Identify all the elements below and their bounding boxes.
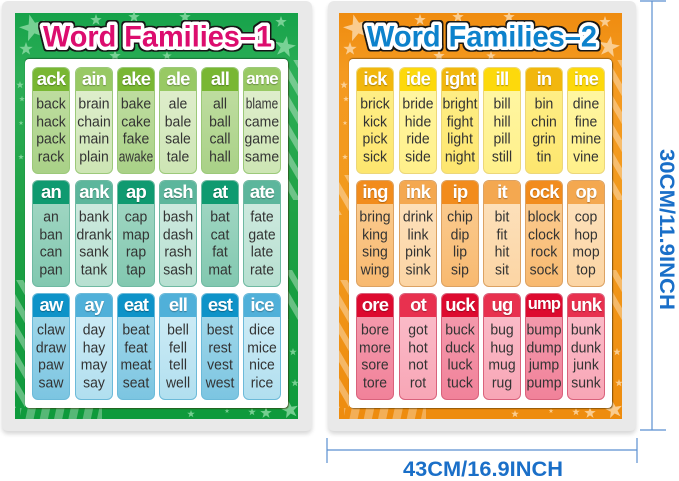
row: orange families: sing	[362, 242, 388, 260]
row: blue families: seat	[123, 373, 149, 390]
row: red families: luck	[448, 355, 472, 373]
row: yellow families: ick	[363, 68, 387, 89]
row: red families: duck	[445, 338, 475, 355]
row: orange families: rock	[531, 242, 557, 260]
row: blue families: well	[166, 373, 190, 390]
row: orange families: it	[497, 181, 507, 202]
row: yellow families: sick	[363, 147, 387, 164]
row: orange families: ip	[453, 181, 467, 202]
row: green families: ale	[166, 68, 190, 89]
row: green families: ale	[169, 94, 187, 112]
row: red families: tore	[363, 373, 387, 390]
row: blue families: meat	[120, 355, 152, 373]
row: yellow families: tin	[537, 147, 551, 164]
row: blue families	[32, 293, 281, 400]
row: red families	[356, 293, 605, 400]
row: orange families: bring	[359, 207, 391, 225]
row: green families: cake	[121, 112, 151, 129]
row: red families: rug	[492, 373, 512, 390]
row: orange families: sock	[530, 260, 558, 277]
row: blue families: bell	[167, 320, 189, 338]
poster: Word Families 2	[326, 1, 638, 436]
row: yellow families: ill	[495, 68, 509, 89]
height dimension line	[640, 1, 666, 430]
row: orange families: dip	[451, 225, 469, 242]
row: green families: chain	[77, 112, 111, 129]
row: yellow families: pick	[363, 129, 387, 147]
row: blue families: mice	[247, 338, 277, 355]
row: orange families: wing	[361, 260, 389, 277]
row: red families: dunk	[571, 338, 601, 355]
row: red families: hug	[490, 338, 514, 355]
row: red families: unk	[571, 294, 601, 315]
row: blue families: hay	[83, 338, 105, 355]
row: blue families: ice	[250, 294, 274, 315]
row: orange families: ock	[529, 181, 559, 202]
row: teal families: drank	[76, 225, 112, 242]
row: blue families: nice	[249, 355, 275, 373]
row: orange families: sip	[451, 260, 469, 277]
row: red families: rot	[410, 373, 426, 390]
row: green families: ball	[209, 112, 231, 129]
row: red families: uck	[445, 294, 475, 315]
row: yellow families: bride	[402, 94, 434, 112]
row: teal families: gate	[248, 225, 276, 242]
row: blue families: saw	[39, 373, 63, 390]
row: blue families: beat	[122, 320, 150, 338]
row: green families: all	[213, 94, 227, 112]
row: yellow families: in	[537, 68, 551, 89]
row: yellow families: ride	[406, 129, 430, 147]
row: blue families: best	[207, 320, 233, 338]
row: yellow families: kick	[363, 112, 387, 129]
row: yellow families: vine	[573, 147, 599, 164]
row: yellow families: night	[445, 147, 475, 164]
row: orange families: pink	[405, 242, 431, 260]
row: red families: hot	[408, 338, 428, 355]
row: green families: bale	[165, 112, 191, 129]
row: green families: ain	[82, 68, 106, 89]
row: blue families: claw	[37, 320, 65, 338]
row: orange families: op	[575, 181, 596, 202]
row: yellow families: grin	[532, 129, 556, 147]
row: yellow families: brick	[360, 94, 390, 112]
row: green families: awake	[119, 147, 153, 164]
row: orange families	[356, 180, 605, 287]
row: yellow families: dine	[573, 94, 599, 112]
row: orange families: chip	[447, 207, 473, 225]
row: red families: junk	[573, 355, 599, 373]
row: red families: pump	[526, 373, 562, 390]
width dimension line	[327, 438, 637, 463]
row: teal families: rate	[250, 260, 274, 277]
row: yellow families: hide	[405, 112, 431, 129]
row: yellow families: chin	[531, 112, 557, 129]
row: yellow families: hill	[493, 112, 511, 129]
row: teal families: ap	[126, 181, 146, 202]
row: orange families: lip	[453, 242, 467, 260]
row: teal families: ash	[163, 181, 193, 202]
row: yellow families: side	[405, 147, 431, 164]
row: orange families: block	[528, 207, 560, 225]
row: green families: hack	[36, 112, 66, 129]
row: green families: sale	[165, 129, 191, 147]
row: green families: blame	[246, 94, 278, 112]
row: teal families: cap	[125, 207, 147, 225]
row: red families: mug	[488, 355, 516, 373]
row: red families: bug	[490, 320, 514, 338]
row: red families: sore	[361, 355, 389, 373]
row: green families: bake	[121, 94, 151, 112]
row: blue families: eat	[124, 294, 148, 315]
row: teal families: tank	[81, 260, 107, 277]
height label: 30CM/11.9INCH	[655, 149, 678, 310]
row: teal families: ban	[39, 225, 63, 242]
row: orange families: king	[362, 225, 388, 242]
row: green families: came	[245, 112, 279, 129]
row: red families: tuck	[447, 373, 473, 390]
row: teal families: ate	[250, 181, 274, 202]
row: green families: all	[211, 68, 229, 89]
row: red families: ore	[362, 294, 388, 315]
row: green families: plain	[79, 147, 109, 164]
laminated card backing	[328, 1, 636, 431]
row: green families: main	[79, 129, 109, 147]
row: orange families: mop	[572, 242, 600, 260]
row: orange families: bit	[495, 207, 509, 225]
row: orange families: top	[576, 260, 596, 277]
row: red families: got	[408, 320, 428, 338]
row: orange families: link	[407, 225, 428, 242]
row: red families: dump	[526, 338, 562, 355]
row: green families: call	[209, 129, 230, 147]
row: teal families: cat	[211, 225, 229, 242]
title: Word Families–1	[43, 20, 272, 54]
row: blue families: vest	[207, 355, 233, 373]
row: teal families: pan	[39, 260, 63, 277]
row: blue families: est	[208, 294, 232, 315]
row: red families: bore	[361, 320, 389, 338]
row: yellow families: ine	[574, 68, 598, 89]
row: red families: ug	[491, 294, 512, 315]
row: teal families: bat	[210, 207, 230, 225]
row: green families: ame	[246, 69, 278, 88]
row: orange families: cop	[575, 207, 597, 225]
row: green families: same	[245, 147, 279, 164]
row: blue families: rice	[251, 373, 273, 390]
row: green families: game	[244, 129, 280, 147]
row: blue families: west	[206, 373, 234, 390]
row: teal families: late	[251, 242, 273, 260]
row: green families: ack	[37, 68, 65, 89]
row: yellow families: light	[447, 129, 473, 147]
row: blue families: ay	[84, 294, 103, 315]
row: yellow families: still	[492, 147, 512, 164]
row: yellow families: fine	[575, 112, 597, 129]
orange background with stars, stripes and title	[339, 11, 622, 419]
row: blue families: say	[83, 373, 105, 390]
row: yellow families: ight	[445, 68, 475, 89]
row: red families: bump	[526, 320, 562, 338]
laminated card backing	[2, 1, 312, 431]
row: orange families: drink	[403, 207, 433, 225]
row: teal families: an	[43, 207, 59, 225]
row: teal families: tap	[126, 260, 146, 277]
white table panel	[25, 59, 288, 408]
row: teal families: can	[40, 242, 62, 260]
row: yellow families: pill	[493, 129, 511, 147]
width label: 43CM/16.9INCH	[403, 458, 563, 481]
row: blue families: aw	[39, 294, 63, 315]
row: orange families: fit	[497, 225, 507, 242]
title: Word Families–2	[367, 20, 597, 54]
row: blue families: day	[83, 320, 105, 338]
row: blue families: fell	[169, 338, 187, 355]
row: orange families: ing	[362, 181, 388, 202]
row: teal families: map	[122, 225, 150, 242]
row: red families: sunk	[571, 373, 601, 390]
row: green families: ake	[122, 68, 150, 89]
row: yellow families: bill	[493, 94, 511, 112]
row: green families: rack	[38, 147, 64, 164]
row: teal families: sank	[79, 242, 109, 260]
row: yellow families: bin	[535, 94, 553, 112]
row: yellow families	[356, 67, 605, 174]
row: teal families: fate	[250, 207, 274, 225]
row: blue families: draw	[36, 338, 66, 355]
row: teal families: rap	[126, 242, 146, 260]
row: red families: more	[359, 338, 391, 355]
row: orange families: ink	[406, 181, 430, 202]
row: green families: hall	[209, 147, 231, 164]
poster: Word Families 1	[0, 1, 314, 436]
row: teal families: rash	[164, 242, 192, 260]
row: green families	[32, 67, 281, 174]
row: blue families: feat	[124, 338, 148, 355]
row: blue families: dice	[249, 320, 275, 338]
row: green families: back	[36, 94, 66, 112]
row: teal families: at	[213, 181, 227, 202]
row: green families: brain	[78, 94, 110, 112]
row: blue families: rest	[208, 338, 232, 355]
white table panel	[349, 59, 612, 408]
row: blue families: tell	[169, 355, 187, 373]
row: red families: ump	[528, 295, 560, 313]
row: red families: not	[408, 355, 428, 373]
row: teal families: sash	[163, 260, 193, 277]
row: blue families: may	[81, 355, 107, 373]
row: orange families: hit	[495, 242, 509, 260]
row: yellow families: ide	[406, 68, 430, 89]
row: green families: tale	[167, 147, 189, 164]
row: orange families: sit	[495, 260, 509, 277]
row: teal families: dash	[163, 225, 193, 242]
row: teal families: bank	[79, 207, 109, 225]
row: orange families: hop	[574, 225, 598, 242]
row: blue families: paw	[38, 355, 64, 373]
row: teal families: fat	[212, 242, 228, 260]
row: yellow families: fight	[447, 112, 473, 129]
row: green families: pack	[36, 129, 66, 147]
row: green families: fake	[123, 129, 149, 147]
row: teal families: mat	[208, 260, 232, 277]
row: teal families: ank	[79, 181, 109, 202]
row: teal families: bash	[163, 207, 193, 225]
row: orange families: clock	[528, 225, 560, 242]
green background with stars, stripes and title	[15, 11, 299, 419]
row: teal families: an	[41, 181, 61, 202]
row: red families: buck	[445, 320, 475, 338]
row: blue families: ell	[169, 294, 187, 315]
row: yellow families: mine	[571, 129, 601, 147]
row: red families: jump	[529, 355, 559, 373]
row: yellow families: bright	[442, 94, 478, 112]
row: red families: bunk	[571, 320, 601, 338]
row: orange families: sink	[406, 260, 430, 277]
row: teal families	[32, 180, 281, 287]
row: red families: ot	[410, 294, 426, 315]
